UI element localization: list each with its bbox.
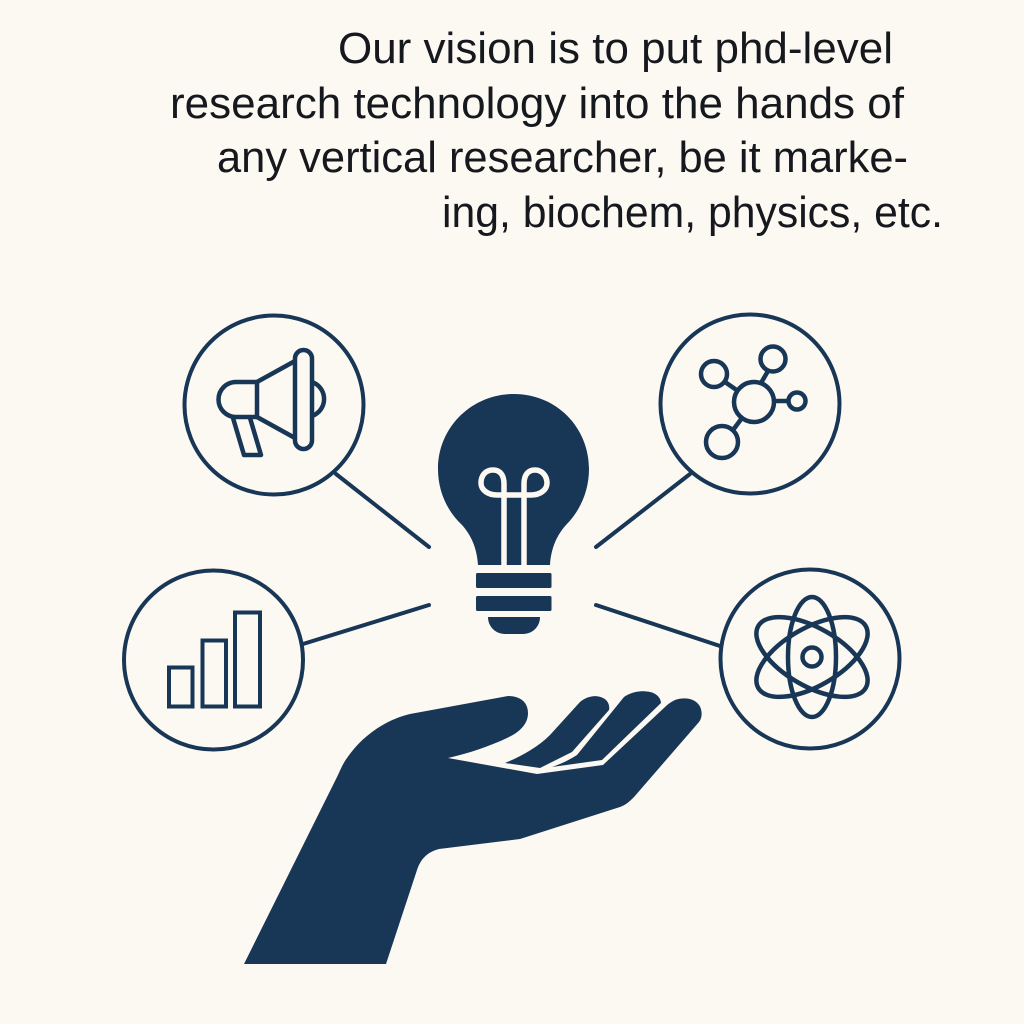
icon circle: molecule (biochem) <box>660 314 840 494</box>
icon: light bulb <box>438 394 589 634</box>
megaphone handle <box>233 418 261 455</box>
bulb screw base <box>476 573 552 588</box>
icon circle: atom (physics) <box>720 570 900 748</box>
icon: open hand <box>244 691 702 964</box>
megaphone body <box>218 382 257 417</box>
vision statement text: any vertical researcher, be it marke- <box>217 133 908 182</box>
bulb glass <box>438 394 589 565</box>
vision statement text <box>170 24 943 237</box>
vision statement text: ing, biochem, physics, etc. <box>442 188 943 237</box>
megaphone horn <box>257 361 295 438</box>
middle finger <box>552 691 661 767</box>
icon circle: bar chart (data) <box>124 570 303 750</box>
megaphone back arc <box>312 382 324 416</box>
megaphone rim <box>295 350 312 449</box>
bulb filament <box>481 470 547 566</box>
palm and thumb <box>244 696 702 964</box>
vision statement text: Our vision is to put phd-level <box>338 24 893 73</box>
vision statement text: research technology into the hands of <box>170 79 905 128</box>
icon circle: megaphone (marketing) <box>184 316 364 494</box>
connector lines <box>303 474 720 646</box>
index finger <box>505 696 609 768</box>
